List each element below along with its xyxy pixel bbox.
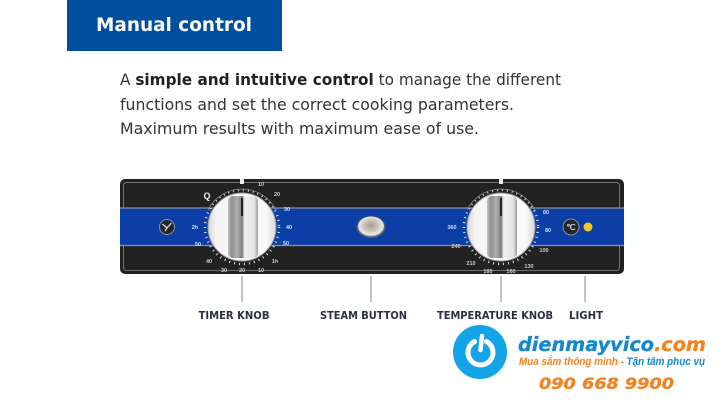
temperature scale: 180 <box>483 269 493 275</box>
steam button <box>356 216 386 238</box>
label: light: LIGHT <box>569 310 604 322</box>
timer scale: Q <box>203 191 211 201</box>
callout lines <box>242 276 585 302</box>
label: temperature knob: TEMPERATURE KNOB <box>437 310 553 322</box>
brand name: dienmayvico.com <box>518 333 706 356</box>
intro text block: Maximum results with maximum ease of use. <box>120 119 479 138</box>
label: timer knob: TIMER KNOB <box>198 310 270 322</box>
timer scale: 20 <box>274 192 280 198</box>
temperature scale: 100 <box>539 248 549 254</box>
temperature scale: 60 <box>543 210 549 216</box>
intro text block <box>120 70 561 138</box>
timer scale: 50 <box>195 242 201 248</box>
icon: temperature symbol <box>563 219 579 235</box>
logo: diện máy vico <box>453 325 706 393</box>
intro text block: A simple and intuitive control to manage the different <box>120 70 561 89</box>
temperature scale: 210 <box>466 261 476 267</box>
timer scale: 2h <box>192 225 199 231</box>
timer scale: 40 <box>206 259 212 265</box>
timer scale: 30 <box>221 268 227 274</box>
timer scale <box>192 179 292 274</box>
timer scale: 10 <box>258 268 264 274</box>
temperature knob <box>447 179 551 275</box>
temperature scale <box>447 179 551 275</box>
light indicator <box>584 222 592 232</box>
temperature scale: 360 <box>447 225 457 231</box>
timer scale: 10 <box>258 182 264 188</box>
timer scale: 40 <box>286 225 292 231</box>
phone number: 090 668 9900 <box>539 374 674 393</box>
temperature scale: 80 <box>545 228 551 234</box>
heading: Manual control <box>67 0 282 51</box>
panel: oven control panel <box>120 179 624 275</box>
heading: Manual control: Manual control <box>96 14 252 36</box>
label: steam button: STEAM BUTTON <box>320 310 407 322</box>
timer scale: 1h <box>272 259 279 265</box>
timer knob <box>192 179 292 274</box>
tagline: Mua sắm thông minh - Tận tâm phục vụ <box>519 355 705 368</box>
timer scale: 30 <box>284 207 290 213</box>
icon: temperature symbol: ℃ <box>567 223 576 232</box>
icon: power symbol <box>453 325 507 379</box>
intro text block: functions and set the correct cooking parameters. <box>120 95 514 114</box>
icon: timer symbol <box>160 220 174 234</box>
temperature scale: 160 <box>506 269 516 275</box>
temperature scale: 130 <box>524 264 534 270</box>
temperature scale: 240 <box>451 244 461 250</box>
timer scale: 50 <box>283 241 289 247</box>
timer scale: 20 <box>239 268 245 274</box>
